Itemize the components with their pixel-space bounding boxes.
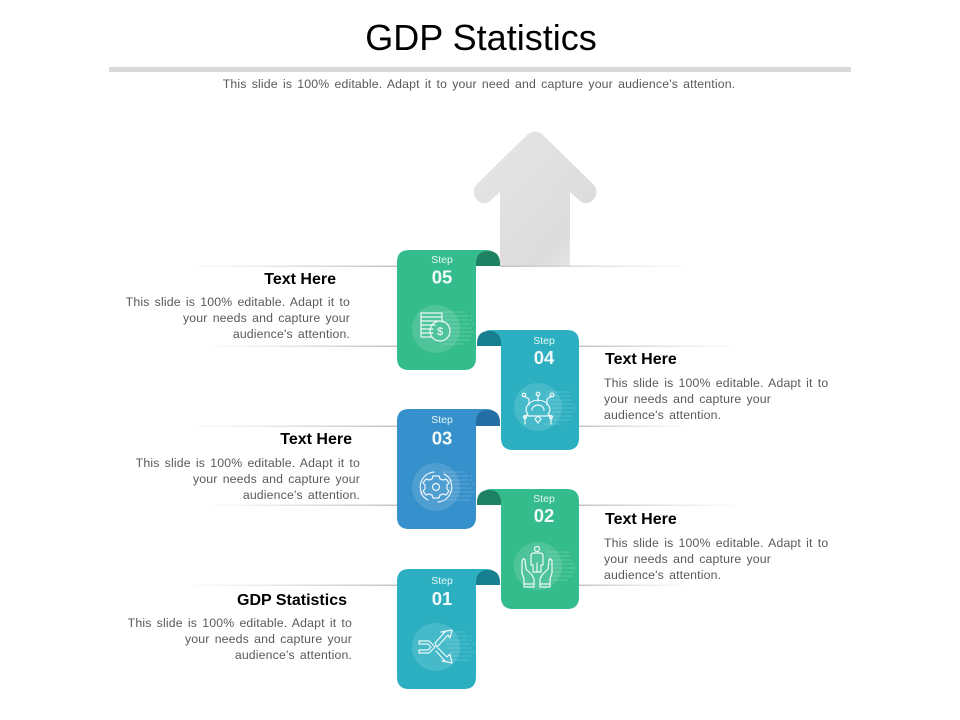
icon: hands holding person [514,542,576,590]
body: your needs and capture your [604,552,771,566]
heading: Text Here [280,431,352,448]
number 01: 01 [432,588,452,609]
fold 01 [476,570,500,585]
body: This slide is 100% editable. Adapt it to [128,616,352,630]
fold 05 [476,251,500,266]
text block: step 02 [604,511,828,582]
body: This slide is 100% editable. Adapt it to [604,376,828,390]
step 04 card [477,330,579,450]
icon: crossing arrows [412,623,474,671]
body: audience's attention. [604,408,721,422]
step 05 card [397,250,500,370]
body: your needs and capture your [183,311,350,325]
number 04: 04 [534,347,555,368]
label 05: Step [431,254,453,266]
body: audience's attention. [243,488,360,502]
text block: step 03 [136,431,360,502]
title rule [109,67,851,72]
body: This slide is 100% editable. Adapt it to [136,456,360,470]
step 03 card [397,409,500,529]
icon: circuit brain [514,383,576,431]
body: audience's attention. [233,327,350,341]
label 01: Step [431,575,453,587]
body: your needs and capture your [185,632,352,646]
step 01 card [397,569,500,689]
text block: step 04 [604,351,828,422]
subtitle: This slide is 100% editable. Adapt it to your need and capture your audience's attention. [223,77,735,91]
heading: Text Here [605,351,677,368]
label 03: Step [431,414,453,426]
icon: gear with arrows [412,463,474,511]
fold 04 [477,331,501,346]
label 04: Step [533,335,555,347]
heading: Text Here [264,271,336,288]
number 05: 05 [432,266,452,288]
number 02: 02 [534,505,554,526]
heading: GDP Statistics [237,592,347,609]
body: This slide is 100% editable. Adapt it to [604,536,828,550]
icon: coins and ledger: $ [437,326,443,338]
body: This slide is 100% editable. Adapt it to [126,295,350,309]
heading: Text Here [605,511,677,528]
connector lines [180,266,744,586]
text block: step 05 [126,271,350,341]
up arrow [474,132,596,266]
body: audience's attention. [235,648,352,662]
step 02 card [477,489,579,609]
body: your needs and capture your [193,472,360,486]
fold 03 [476,410,500,426]
body: audience's attention. [604,568,721,582]
text block: step 01 [128,592,352,662]
title: GDP Statistics [365,17,597,58]
number 03: 03 [432,428,452,448]
label 02: Step [533,493,555,505]
body: your needs and capture your [604,392,771,406]
fold 02 [477,490,501,505]
